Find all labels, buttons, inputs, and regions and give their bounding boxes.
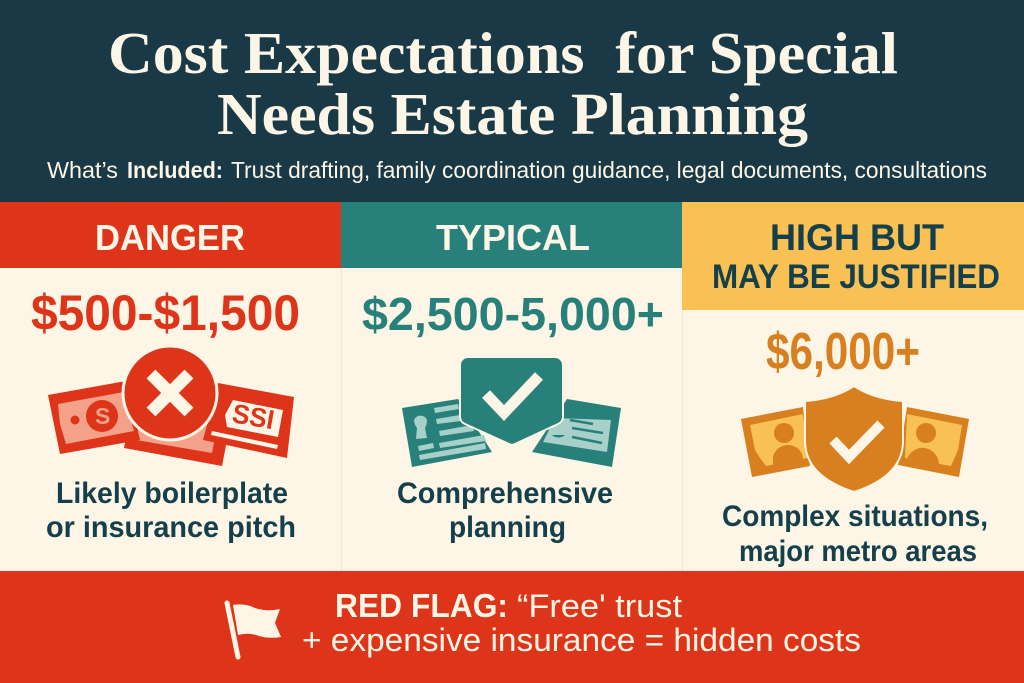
heading: high but may be justified xyxy=(712,217,1000,296)
caption: danger: or insurance pitch xyxy=(46,511,296,544)
panel: high but may be justified xyxy=(682,202,1024,571)
heading: typical: TYPICAL xyxy=(436,217,590,258)
callout: red flag text: RED FLAG: xyxy=(335,587,508,624)
title xyxy=(108,20,898,147)
subtitle: what's included: Trust drafting, family coordination guidance, legal documents, consultations xyxy=(231,157,987,183)
subtitle: what's included: Included: xyxy=(127,157,223,183)
icon: crossed-out money and SSI card: SSI xyxy=(230,398,277,435)
title: Cost Expectations for Special xyxy=(108,20,898,86)
panel: header xyxy=(0,0,1024,202)
icon: shield check with ID cards xyxy=(402,357,621,467)
callout: red flag text: “Free' trust xyxy=(517,588,682,624)
caption: high xyxy=(722,500,988,568)
callout: red flag text: + expensive insurance = hidden costs xyxy=(302,622,861,658)
callout: red flag text xyxy=(302,587,861,658)
caption: high: Complex situations, xyxy=(722,500,988,533)
price: danger: $500-$1,500 xyxy=(31,285,300,341)
caption: typical: Comprehensive xyxy=(397,477,613,510)
icon: crossed-out money and SSI card: S xyxy=(95,403,110,429)
subtitle: what's included: What’s xyxy=(47,157,118,183)
panel: red flag banner xyxy=(0,571,1024,683)
caption: danger: Likely boilerplate xyxy=(56,477,288,510)
heading: danger: DANGER xyxy=(95,217,245,258)
price: high: $6,000+ xyxy=(766,323,920,381)
caption: danger xyxy=(46,477,296,544)
icon: crossed-out money and SSI card xyxy=(48,346,294,466)
panel: typical xyxy=(341,202,682,571)
heading: high but may be justified: HIGH BUT xyxy=(770,217,944,258)
price: typical: $2,500-5,000+ xyxy=(362,288,664,340)
panel: danger xyxy=(0,202,341,571)
icon: shield check with bills xyxy=(741,386,969,492)
title: Needs Estate Planning xyxy=(217,81,808,147)
caption: high: major metro areas xyxy=(739,535,977,568)
icon: flag xyxy=(227,603,281,657)
heading: high but may be justified: MAY BE JUSTIFIED xyxy=(712,258,1000,296)
caption: typical: planning xyxy=(449,511,566,544)
caption: typical xyxy=(397,477,613,544)
